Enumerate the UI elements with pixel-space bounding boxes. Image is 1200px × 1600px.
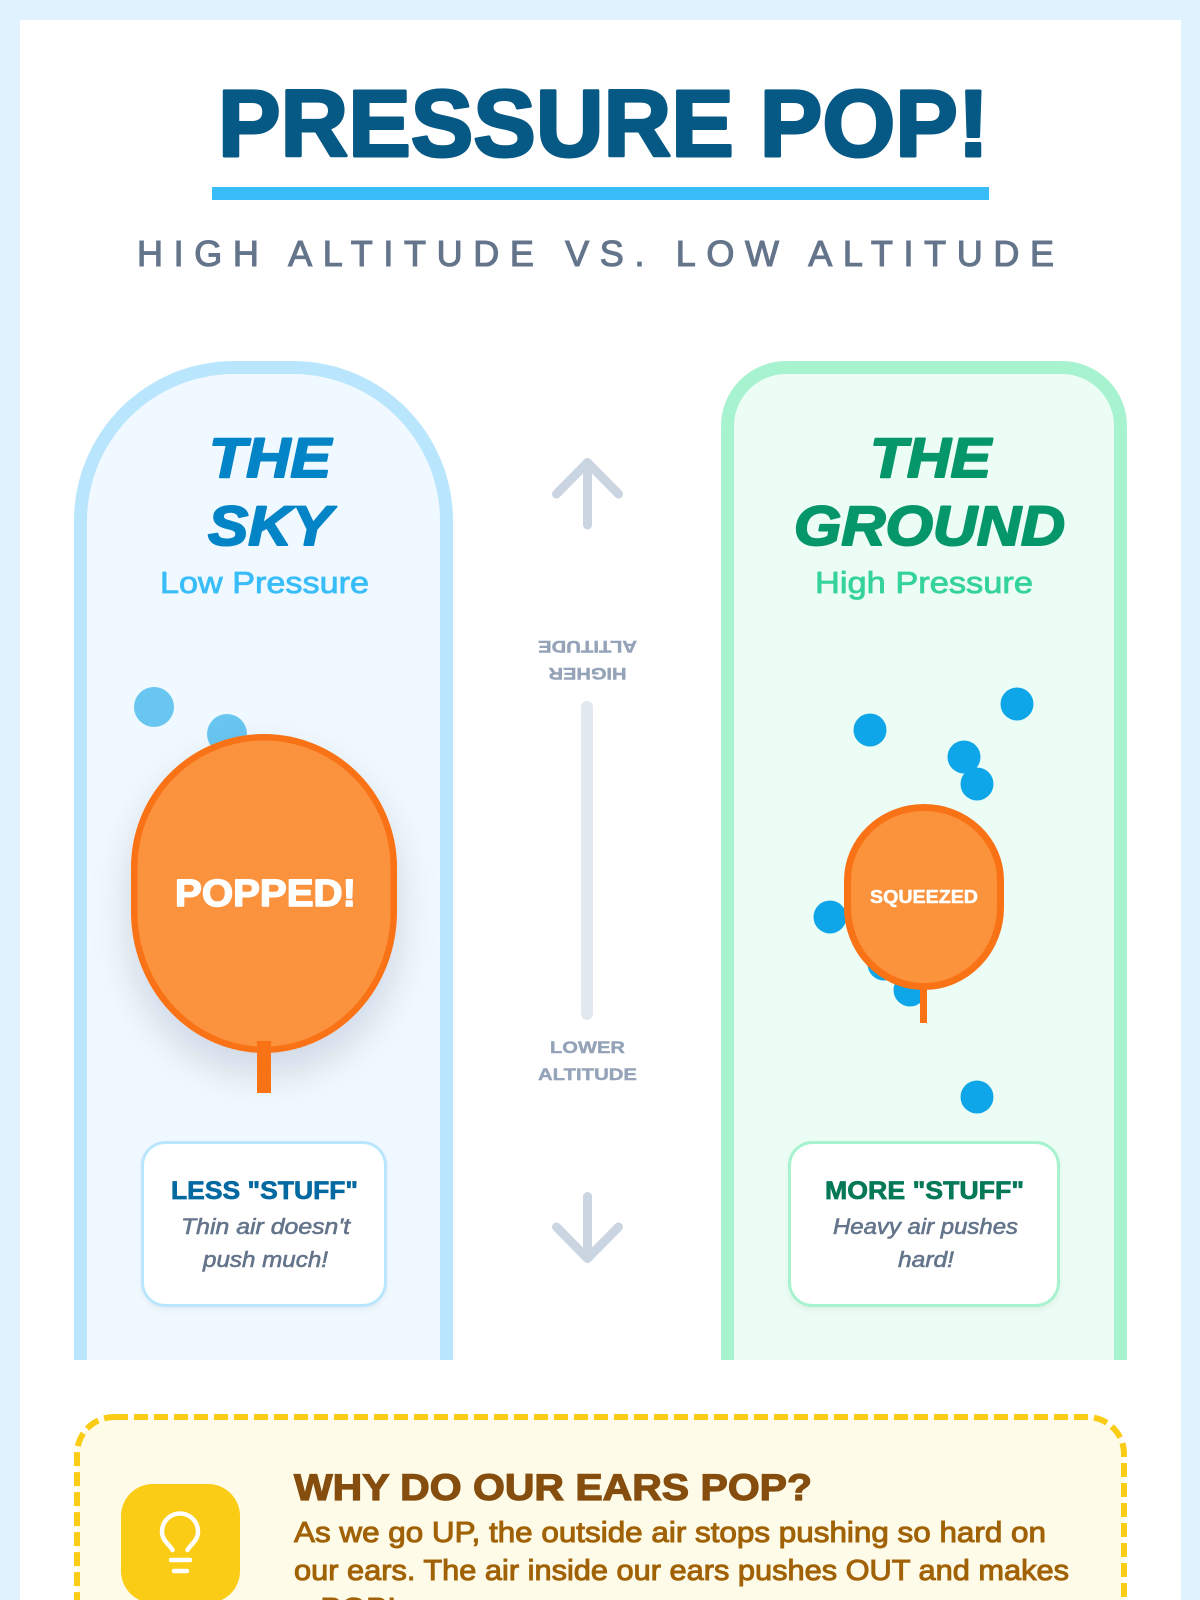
altitude bar bbox=[581, 701, 593, 1020]
panel: the sky bbox=[74, 361, 453, 1360]
ground heading bbox=[794, 426, 1065, 557]
callout body: our ears. The air inside our ears pushes OUT and makes bbox=[294, 1555, 1069, 1587]
sky info card bbox=[142, 1142, 386, 1306]
ground heading: THE bbox=[870, 426, 993, 489]
callout body bbox=[294, 1517, 1069, 1600]
dense air particles bbox=[814, 688, 1034, 1114]
sky subheading: Low Pressure bbox=[160, 565, 369, 600]
sky heading: THE bbox=[209, 426, 333, 489]
sky info card: Thin air doesn't bbox=[181, 1214, 351, 1239]
large balloon bbox=[134, 737, 394, 1093]
higher altitude label, upside down: HIGHER bbox=[548, 664, 626, 683]
higher altitude label, upside down: ALTITUDE bbox=[538, 637, 637, 656]
icon: up arrow bbox=[556, 462, 618, 525]
higher altitude label, upside down bbox=[538, 637, 637, 683]
ground info card: Heavy air pushes bbox=[833, 1214, 1018, 1239]
title: PRESSURE POP! bbox=[218, 71, 989, 177]
sparse air particles bbox=[134, 687, 247, 754]
ground info card: MORE "STUFF" bbox=[825, 1177, 1024, 1205]
subtitle: HIGH ALTITUDE VS. LOW ALTITUDE bbox=[137, 233, 1054, 274]
panel: the ground bbox=[721, 361, 1127, 1360]
callout heading: WHY DO OUR EARS POP? bbox=[294, 1467, 812, 1508]
sky info card: push much! bbox=[202, 1247, 328, 1272]
sky info card: LESS "STUFF" bbox=[171, 1177, 358, 1205]
lower altitude label: LOWER bbox=[550, 1038, 625, 1057]
sky heading bbox=[208, 426, 337, 557]
sky heading: SKY bbox=[208, 494, 337, 557]
title underline bbox=[212, 187, 989, 200]
large balloon: POPPED! bbox=[175, 873, 356, 915]
lower altitude label: ALTITUDE bbox=[538, 1065, 637, 1084]
icon: light bulb bbox=[121, 1484, 240, 1600]
small balloon: SQUEEZED bbox=[870, 887, 978, 907]
callout: why do our ears pop bbox=[77, 1417, 1124, 1600]
ground subheading: High Pressure bbox=[815, 565, 1033, 600]
altitude scale bbox=[538, 462, 637, 1258]
small balloon bbox=[848, 808, 1000, 1023]
ground info card bbox=[790, 1142, 1058, 1306]
ground info card: hard! bbox=[898, 1247, 954, 1272]
lower altitude label bbox=[538, 1038, 637, 1084]
icon: down arrow bbox=[556, 1196, 618, 1258]
callout body: As we go UP, the outside air stops pushing so hard on bbox=[294, 1517, 1046, 1549]
ground heading: GROUND bbox=[794, 494, 1065, 557]
